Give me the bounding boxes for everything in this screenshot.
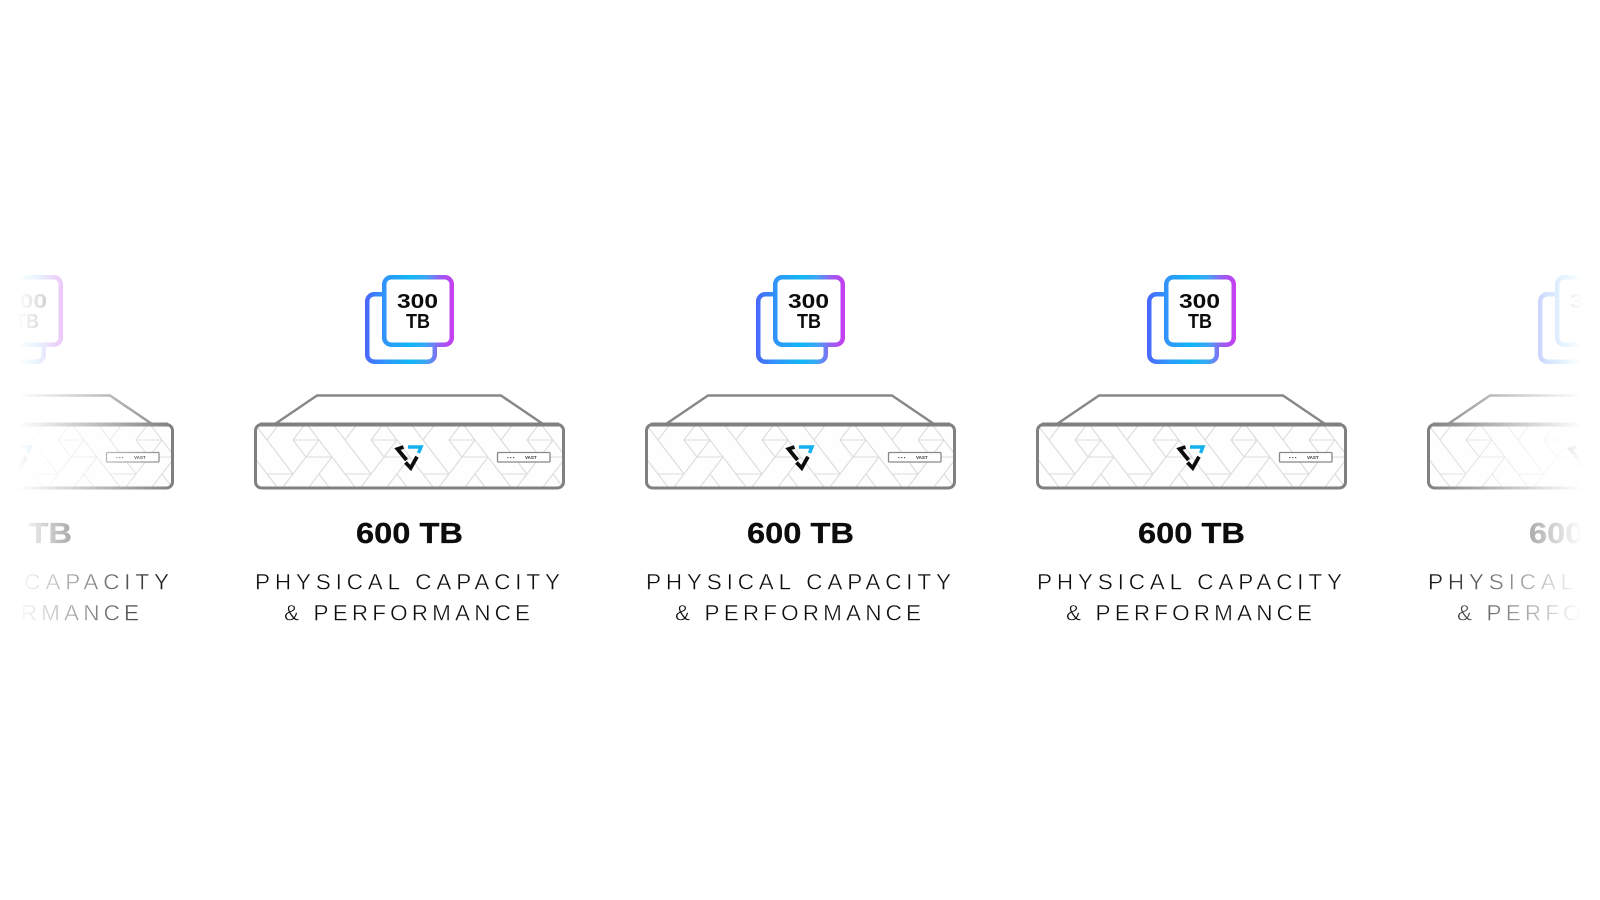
caption: & PERFORMANCE	[675, 600, 921, 626]
column: node 1	[255, 277, 564, 626]
server chassis	[256, 396, 564, 488]
icon: 300 TB stacked squares: TB	[797, 311, 821, 333]
caption	[1037, 570, 1342, 626]
icon: 300 TB stacked squares	[0, 277, 61, 362]
column: partially faded right node	[1428, 277, 1600, 626]
caption: & PERFORMANCE	[284, 600, 530, 626]
column: partially faded left node	[0, 277, 172, 626]
server chassis	[1038, 396, 1346, 488]
caption	[646, 570, 951, 626]
server chassis	[0, 396, 172, 488]
icon: 300 TB stacked squares	[758, 277, 843, 362]
server chassis: ▪ ▪ ▪	[1289, 455, 1296, 460]
icon: 300 TB stacked squares: TB	[406, 311, 430, 333]
icon: 300 TB stacked squares	[367, 277, 452, 362]
capacity value: 600 TB	[747, 518, 854, 550]
caption	[255, 570, 560, 626]
icon: 300 TB stacked squares	[1149, 277, 1234, 362]
column: node 2	[646, 277, 954, 626]
column: node 3	[1037, 277, 1346, 626]
right fade overlay	[1428, 0, 1600, 900]
server chassis: VAST	[134, 455, 146, 460]
capacity value: 600 TB	[356, 518, 463, 550]
capacity value: 600 TB	[1138, 518, 1245, 550]
server chassis: ▪ ▪ ▪	[898, 455, 905, 460]
caption: & PERFORMANCE	[1066, 600, 1312, 626]
icon: 300 TB stacked squares: 300	[397, 291, 438, 313]
icon: 300 TB stacked squares: TB	[1188, 311, 1212, 333]
icon: 300 TB stacked squares	[1540, 277, 1600, 362]
server chassis: VAST	[525, 455, 537, 460]
server chassis: VAST	[916, 455, 928, 460]
caption: PHYSICAL CAPACITY	[646, 570, 951, 594]
caption	[0, 570, 169, 626]
left fade overlay	[0, 0, 172, 900]
server chassis: ▪ ▪ ▪	[507, 455, 514, 460]
server chassis	[646, 396, 954, 488]
server chassis: VAST	[1307, 455, 1319, 460]
icon: 300 TB stacked squares: 300	[788, 291, 829, 313]
icon: 300 TB stacked squares: 300	[1179, 291, 1220, 313]
caption: PHYSICAL CAPACITY	[255, 570, 560, 594]
caption	[1428, 570, 1600, 626]
icon: 300 TB stacked squares: 300	[6, 291, 47, 313]
server chassis	[1428, 396, 1600, 488]
icon: 300 TB stacked squares: TB	[15, 311, 39, 333]
server chassis: ▪ ▪ ▪	[116, 455, 123, 460]
caption: PHYSICAL CAPACITY	[1037, 570, 1342, 594]
